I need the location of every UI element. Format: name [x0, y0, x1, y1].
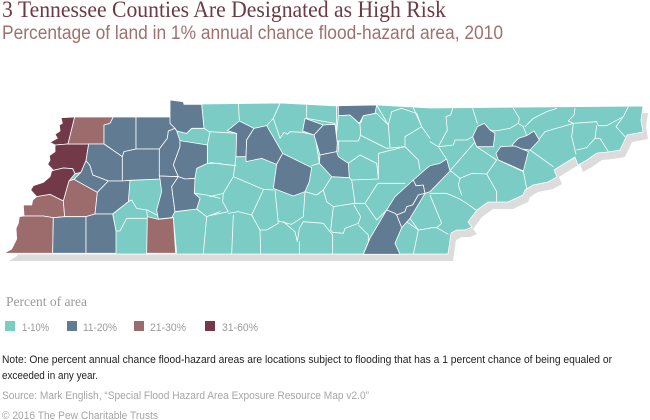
legend item: 21-30%: 21-30% — [150, 322, 186, 334]
legend item: 31-60%: 31-60% — [222, 322, 258, 334]
legend item: 31-60% — [205, 321, 258, 334]
legend item: 1-10% — [5, 321, 49, 334]
legend item: 21-30% — [134, 321, 186, 334]
legend item: 11-20%: 11-20% — [83, 322, 117, 334]
west counties — [4, 100, 220, 253]
legend item: 1-10%: 1-10% — [22, 322, 49, 334]
note: exceeded in any year. — [2, 370, 98, 382]
legend — [5, 294, 258, 334]
central counties — [210, 103, 450, 254]
legend title: Percent of area — [6, 294, 87, 309]
note: Note: One percent annual chance flood-hazard areas are locations subject to flooding that has a 1 percent chance of being equaled or — [2, 354, 612, 366]
source: Source: Mark English, “Special Flood Hazard Area Exposure Resource Map v2.0” — [2, 390, 369, 402]
legend item: 11-20% — [67, 321, 117, 334]
map: Tennessee counties — [4, 100, 648, 261]
east counties — [430, 107, 628, 234]
subtitle: Percentage of land in 1% annual chance flood-hazard area, 2010 — [2, 23, 503, 44]
note — [2, 354, 612, 382]
